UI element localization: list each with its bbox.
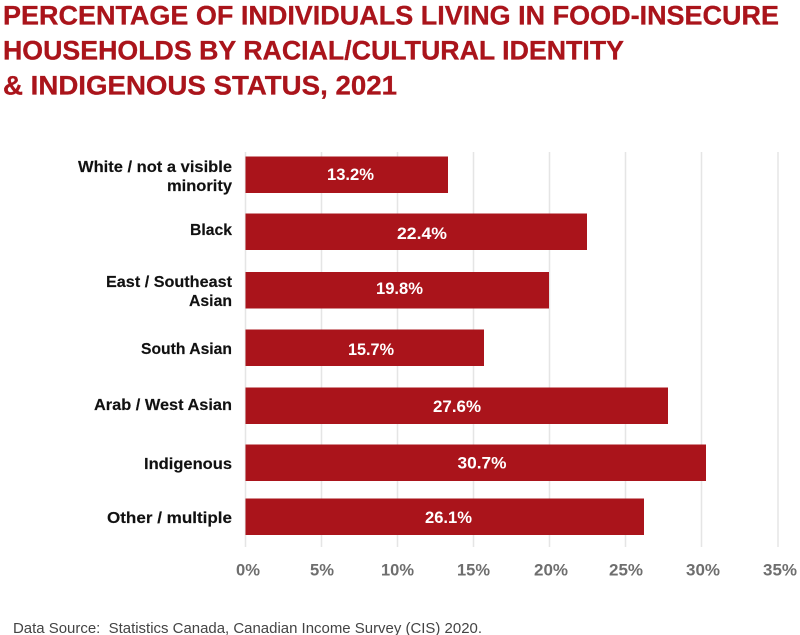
x axis labels <box>236 562 797 580</box>
category labels: Indigenous <box>144 456 232 473</box>
category labels: Other / multiple <box>107 510 232 527</box>
x axis labels: 15% <box>457 562 490 580</box>
x axis labels: 25% <box>609 562 643 580</box>
category labels: White / not a visible <box>78 159 232 176</box>
title: PERCENTAGE OF INDIVIDUALS LIVING IN FOOD-INSECURE <box>3 0 779 30</box>
bar: Arab / West Asian: 27.6% <box>433 398 481 416</box>
title: & INDIGENOUS STATUS, 2021 <box>3 70 397 100</box>
bar: Other / multiple <box>246 498 644 535</box>
bar: White / not a visible minority: 13.2% <box>327 166 374 184</box>
title <box>3 0 779 100</box>
title: HOUSEHOLDS BY RACIAL/CULTURAL IDENTITY <box>3 36 624 66</box>
bar: South Asian: 15.7% <box>348 341 394 359</box>
bar: East / Southeast Asian: 19.8% <box>376 280 423 298</box>
bar: White / not a visible minority <box>246 156 448 193</box>
x axis labels: 10% <box>381 562 414 580</box>
bar: Indigenous: 30.7% <box>458 454 507 472</box>
x axis labels: 0% <box>236 562 260 580</box>
category labels: East / Southeast <box>106 274 233 291</box>
bar: Indigenous <box>246 444 706 481</box>
bar: Other / multiple: 26.1% <box>425 509 472 527</box>
x axis labels: 5% <box>310 562 334 580</box>
grid lines <box>246 152 778 547</box>
x axis labels: 35% <box>763 562 797 580</box>
x axis labels: 30% <box>686 562 720 580</box>
category labels: Arab / West Asian <box>94 397 232 414</box>
category labels <box>78 159 233 527</box>
x axis labels: 20% <box>534 562 568 580</box>
category labels: Black <box>190 222 232 239</box>
bar: East / Southeast Asian <box>246 272 549 308</box>
category labels: minority <box>167 178 232 195</box>
bar: South Asian <box>246 330 484 366</box>
category labels: South Asian <box>141 341 232 358</box>
category labels: Asian <box>189 293 232 310</box>
bar: Black <box>246 214 587 250</box>
bar: Arab / West Asian <box>246 388 668 424</box>
bar: Black: 22.4% <box>397 225 447 243</box>
